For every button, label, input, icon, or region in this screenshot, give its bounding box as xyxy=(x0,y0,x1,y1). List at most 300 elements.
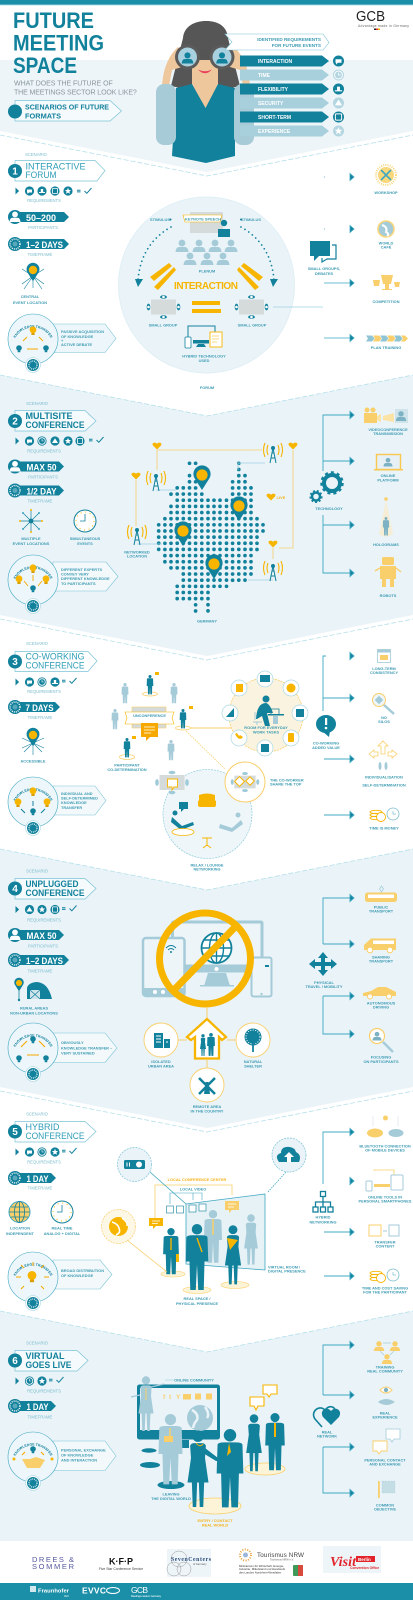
scenario heading: CONFERENCE xyxy=(26,660,84,670)
circle: remote area: REMOTE AREA xyxy=(193,1104,221,1109)
requirements row xyxy=(16,905,76,922)
scenario heading: 4 xyxy=(12,884,18,895)
icon: real time xyxy=(44,1201,81,1236)
banner: scenarios of future formats xyxy=(8,100,122,121)
label: relax lounge: RELAX / LOUNGE xyxy=(190,862,224,868)
panel: scenario 3 co-working conference xyxy=(8,641,406,872)
panel: scenario 2 multisite conference xyxy=(8,401,408,624)
participants: 50–200 xyxy=(26,213,56,224)
handshake figures xyxy=(188,1429,243,1528)
title: FUTURE xyxy=(13,8,94,33)
footer band xyxy=(0,1583,413,1600)
logo: Fraunhofer: IAO xyxy=(64,1594,70,1598)
stimulus arrows left xyxy=(135,217,172,287)
logo: Seven Centers xyxy=(167,1549,212,1577)
scenario heading: 5 xyxy=(12,1127,18,1138)
callout: knowledge transfer 4: KNOWLEDGE TRANSFER – xyxy=(61,1046,113,1050)
callout: knowledge transfer 5: OF KNOWLEDGE xyxy=(61,1273,94,1278)
stimulus arrows left: STIMULUS xyxy=(150,217,170,222)
timeframe: TIMEFRAME xyxy=(28,252,53,257)
central circle: interaction xyxy=(118,197,294,373)
icon: time and cost saving xyxy=(362,1269,408,1294)
icon: transfer content: TRANSFER xyxy=(374,1240,396,1244)
icon: rural areas: NON-URBAN LOCATIONS xyxy=(10,1010,58,1016)
participants grey xyxy=(112,683,177,760)
scenario heading: SCENARIO xyxy=(25,152,48,157)
icon: world cafe: WORLD xyxy=(379,240,394,246)
connector lines xyxy=(186,728,232,769)
title xyxy=(13,8,104,78)
participants: PARTICIPANTS xyxy=(28,474,58,480)
timeframe xyxy=(8,700,60,720)
callout: knowledge transfer 1: PASSIVE ACQUISITION xyxy=(61,329,104,334)
timeframe: 1 DAY xyxy=(26,1402,49,1413)
networked towers: LOCATION xyxy=(127,554,147,558)
logo: Drees and Sommer: SOMMER xyxy=(32,1562,75,1571)
circle: natural shelter: SHELTER xyxy=(244,1064,262,1068)
icon: multiple event locations: MULTIPLE xyxy=(21,536,41,541)
icon: personal contact: AND EXCHANGE xyxy=(369,1462,401,1466)
icon: simultaneous events xyxy=(70,510,101,546)
banner: identified requirements xyxy=(225,34,329,50)
online monitor: f xyxy=(163,1394,166,1401)
callout: knowledge transfer 6 xyxy=(8,1432,116,1491)
callout: knowledge transfer 3: KNOWLEDGE xyxy=(61,800,87,805)
prohibition sign xyxy=(160,913,250,1004)
timeframe: 1–2 DAYS xyxy=(26,240,63,251)
small groups debates xyxy=(273,241,340,307)
scenario heading: SCENARIO xyxy=(26,401,49,406)
banner: identified requirements: FOR FUTURE EVENTS xyxy=(272,43,321,48)
icon: online platform: PLATFORM xyxy=(377,478,399,482)
scenario heading xyxy=(8,868,96,899)
icon: physical mobility arrows: TRAVEL / MOBILITY xyxy=(305,984,343,989)
networked towers xyxy=(124,443,282,581)
icon: real network hearts: REAL xyxy=(322,1430,333,1434)
icon: simultaneous events: SIMULTANEOUS xyxy=(70,536,101,541)
requirements list: EXPERIENCE xyxy=(258,129,291,135)
scenario heading: SCENARIO xyxy=(26,641,49,646)
ribbons xyxy=(150,263,263,313)
logo: KFP: K·F·P xyxy=(109,1556,133,1566)
icon: no silos: NO xyxy=(381,715,387,720)
icon: focusing on participants xyxy=(363,1028,399,1064)
label: online community: ONLINE COMMUNITY xyxy=(174,1378,214,1382)
timeframe xyxy=(8,237,69,257)
logo: GCB: GCB xyxy=(356,8,385,25)
icon: added value xyxy=(312,715,340,750)
scenario heading xyxy=(8,152,105,181)
icon: self-determination xyxy=(362,741,406,788)
requirements row: REQUIREMENTS xyxy=(27,1388,61,1394)
icon: long-term consistency: LONG-TERM xyxy=(372,666,396,671)
icon: sharing transport xyxy=(364,938,396,964)
logo: Tourismus NRW: Tourismus NRW xyxy=(257,1552,304,1559)
online monitor: t xyxy=(169,1394,172,1401)
logo: Tourismus NRW: Ministerium für Wirtschaft, Energie, xyxy=(239,1564,284,1568)
timeframe: TIMEFRAME xyxy=(28,968,53,974)
logo: KFP: Five Star Conference Service xyxy=(99,1567,143,1571)
callout: knowledge transfer 6: PERSONAL EXCHANGE xyxy=(61,1448,106,1452)
logo: Tourismus NRW: Tourismus NRW e.V. xyxy=(270,1558,294,1562)
icon: multiple event locations: EVENT LOCATIONS xyxy=(13,541,50,546)
scenario heading: 2 xyxy=(12,416,18,428)
label: germany: GERMANY xyxy=(197,618,217,624)
callout: knowledge transfer 5: KNOWLEDGE TRANSFER xyxy=(13,1263,52,1276)
circle: everyday work tasks: WORK TASKS xyxy=(253,730,280,734)
requirements row xyxy=(16,677,76,694)
timeframe: TIMEFRAME xyxy=(28,1186,53,1190)
map: Germany dot matrix xyxy=(159,463,263,611)
circle: isolated urban area xyxy=(144,1023,178,1068)
label: relax lounge xyxy=(190,862,224,872)
panel: scenario 4 unplugged conference xyxy=(8,868,399,1114)
icon: time and cost saving: TIME AND COST SAVING xyxy=(362,1286,408,1290)
scenario heading: GOES LIVE xyxy=(26,1360,72,1370)
icon: online tools xyxy=(359,1170,412,1204)
participants: MAX 50 xyxy=(26,462,56,473)
hybrid technology xyxy=(182,326,226,363)
timeframe xyxy=(8,1171,56,1190)
icon: real community: REAL COMMUNITY xyxy=(367,1368,403,1374)
small groups: SMALL GROUP xyxy=(238,322,267,328)
icon: common objective: COMMON xyxy=(376,1502,394,1508)
leaving the digital world: LEAVING xyxy=(162,1492,180,1496)
icon: rural areas: RURAL AREAS xyxy=(20,1006,48,1010)
callout: knowledge transfer 6: KNOWLEDGE TRANSFER xyxy=(13,1443,52,1456)
logo: GCB footer: Meetings made in Germany xyxy=(131,1594,162,1598)
circle: isolated urban area: ISOLATED xyxy=(151,1059,171,1064)
icon: central event location: EVENT LOCATION xyxy=(13,300,47,305)
subtitle: THE MEETINGS SECTOR LOOK LIKE? xyxy=(14,90,137,96)
icon: physical mobility arrows: PHYSICAL xyxy=(314,980,334,985)
requirements list: SECURITY xyxy=(258,101,284,107)
live hearts: LIVE xyxy=(277,495,286,500)
callout: knowledge transfer 2: KNOWLEDGE TRANSFER xyxy=(13,566,52,580)
branch arrows xyxy=(323,1342,354,1496)
circle: natural shelter: NATURAL xyxy=(244,1059,263,1064)
panel: scenario 6 virtual goes live xyxy=(8,1340,406,1528)
logo: Tourismus NRW xyxy=(239,1550,304,1576)
icon: real community xyxy=(367,1341,403,1374)
stimulus arrows right xyxy=(240,217,278,287)
label: virtual room: DIGITAL PRESENCE xyxy=(268,1268,306,1274)
location pins xyxy=(174,465,248,579)
icon: real experience xyxy=(372,1387,398,1420)
logo: GCB: Advantage made in Germany xyxy=(358,24,409,28)
requirements list: INTERACTION xyxy=(258,59,293,65)
callout: knowledge transfer 3: INDIVIDUAL AND xyxy=(61,791,93,796)
logo: GCB footer: GCB xyxy=(131,1585,148,1595)
callout: knowledge transfer 4 xyxy=(8,1022,118,1082)
real space figures xyxy=(161,1224,249,1294)
scenario heading: CONFERENCE xyxy=(26,888,84,898)
icon: videoconference: VIDEOCONFERENCE xyxy=(368,427,408,432)
icon: physical mobility arrows xyxy=(305,952,343,989)
callout: knowledge transfer 3: TRANSFER xyxy=(61,805,82,810)
icon: real time: REAL TIME xyxy=(52,1226,73,1230)
hybrid technology: USED xyxy=(199,358,210,363)
icon: autonomous driving: AUTONOMOUS xyxy=(367,1000,396,1006)
label: real space: PHYSICAL PRESENCE xyxy=(176,1301,218,1306)
panel: scenario 5 hybrid conference xyxy=(6,1112,412,1311)
icon: real experience: EXPERIENCE xyxy=(372,1414,398,1420)
callout: knowledge transfer 2 xyxy=(8,554,118,614)
icon: autonomous driving xyxy=(363,987,396,1010)
logo: KFP xyxy=(99,1556,143,1571)
requirements row xyxy=(16,1147,76,1164)
callout: knowledge transfer 2: DIFFERENT KNOWLEDGE xyxy=(61,576,110,581)
icon: self-determination: SELF-DETERMINATION xyxy=(362,782,406,788)
icon: focusing on participants: FOCUSING xyxy=(371,1054,391,1060)
icon: public transport: PUBLIC xyxy=(374,904,388,910)
logo: Tourismus NRW: Industrie, Mittelstand und Handwerk xyxy=(239,1567,286,1571)
scenario heading: SCENARIO xyxy=(26,868,49,874)
callout: knowledge transfer 3: KNOWLEDGE TRANSFER xyxy=(13,788,52,802)
icon: hybrid networking: HYBRID xyxy=(316,1214,331,1220)
requirements list xyxy=(240,55,344,137)
callout: knowledge transfer 1 xyxy=(8,314,116,373)
woman leaving screen xyxy=(131,1376,164,1431)
small groups debates: SMALL GROUPS, xyxy=(308,266,340,271)
icon: holograms: HOLOGRAMS xyxy=(373,542,399,547)
requirements row: REQUIREMENTS xyxy=(27,198,61,203)
scenario heading: MULTISITE xyxy=(26,411,72,421)
participants: MAX 50 xyxy=(26,931,56,942)
branch arrows xyxy=(323,894,354,1038)
label: table co-working xyxy=(270,778,304,786)
callout: knowledge transfer 1: OF KNOWLEDGE xyxy=(61,334,94,339)
projection screen xyxy=(186,1194,265,1270)
circle: remote area xyxy=(190,1068,224,1114)
icon: real experience: REAL xyxy=(380,1410,391,1416)
participants co-determination: CO-DETERMINATION xyxy=(107,767,147,772)
icon: added value: ADDED VALUE xyxy=(312,745,340,750)
participants co-determination: PARTICIPANT xyxy=(114,762,140,768)
logo: Drees and Sommer xyxy=(32,1555,75,1571)
callout: knowledge transfer 4: OBVIOUSLY xyxy=(61,1040,84,1045)
timeframe: 1/2 DAY xyxy=(26,486,57,497)
timeframe: 7 DAYS xyxy=(26,703,54,714)
icon: sharing transport: SHARING xyxy=(372,954,390,960)
banner: identified requirements: IDENTIFIED REQUIREMENTS xyxy=(257,37,321,42)
logo: Tourismus NRW: des Landes Nordrhein-Westfalen xyxy=(239,1570,282,1574)
icon: accessible xyxy=(20,728,46,764)
callout: knowledge transfer 4: KNOWLEDGE TRANSFER xyxy=(13,1034,52,1048)
frame: local conference: LOCAL VIDEO xyxy=(180,1186,206,1192)
requirements row xyxy=(16,436,104,454)
icon: location independent: LOCATION xyxy=(10,1226,30,1230)
scenario heading: CONFERENCE xyxy=(26,1131,84,1141)
icon: yellow globe xyxy=(102,1210,167,1272)
circle: everyday work tasks: ROOM FOR EVERYDAY xyxy=(244,725,288,730)
label: relax lounge: NETWORKING xyxy=(193,866,221,872)
requirements row: REQUIREMENTS xyxy=(27,1160,61,1164)
icon: format chevrons xyxy=(366,336,408,350)
speech bubbles xyxy=(149,1201,239,1229)
subtitle xyxy=(14,80,137,96)
logo: Fraunhofer: Fraunhofer xyxy=(38,1588,70,1594)
panel: partner logos xyxy=(32,1546,381,1577)
icon: time is money: TIME IS MONEY xyxy=(369,826,399,830)
lounge circle xyxy=(155,762,265,858)
online monitor: Y xyxy=(176,1394,181,1401)
online monitor xyxy=(137,1384,220,1448)
devices xyxy=(143,920,272,996)
icon: competition xyxy=(372,275,400,304)
icon: transfer content xyxy=(369,1225,399,1248)
icon: real time: ANALOG + DIGITAL xyxy=(44,1231,81,1236)
icon: common objective: OBJECTIVE xyxy=(374,1506,396,1512)
connectors xyxy=(178,1007,236,1068)
participants: PARTICIPANTS xyxy=(28,225,58,230)
icon: multiple event locations xyxy=(13,509,50,546)
frame: local conference xyxy=(155,1177,232,1218)
timeframe xyxy=(8,484,64,504)
logo: GCB footer xyxy=(131,1585,162,1598)
participants xyxy=(8,210,69,230)
scenario heading: VIRTUAL xyxy=(26,1351,65,1361)
scenario heading xyxy=(8,1340,88,1371)
scenario heading: SCENARIO xyxy=(26,1112,49,1116)
requirements list: SHORT-TERM xyxy=(258,115,291,121)
scenario heading: 3 xyxy=(12,657,18,668)
participants xyxy=(8,460,64,480)
plenum: PLENUM xyxy=(199,268,215,274)
icon: format chevrons: PLAN TRAINING xyxy=(371,345,401,350)
circle: remote area: IN THE COUNTRY xyxy=(191,1108,224,1114)
subtitle: WHAT DOES THE FUTURE OF xyxy=(14,80,113,88)
scenario heading xyxy=(8,1112,96,1142)
label: table co-working: THE CO-WORKER xyxy=(270,778,304,782)
network lines xyxy=(136,450,293,580)
logo: Visit Berlin xyxy=(323,1546,381,1573)
banner: scenarios of future formats: SCENARIOS OF FUTURE xyxy=(25,102,109,112)
scenario heading: CONFERENCE xyxy=(26,420,84,430)
branch arrows xyxy=(323,1128,354,1280)
icon: autonomous driving: DRIVING xyxy=(373,1004,389,1010)
icon: workshop: WORKSHOP xyxy=(374,190,398,195)
icon: hybrid networking: NETWORKING xyxy=(309,1220,337,1224)
icon: public transport xyxy=(365,886,397,914)
scenario heading: INTERACTIVE xyxy=(26,162,86,172)
icon: videoconference xyxy=(364,408,408,436)
icon: online platform: ONLINE xyxy=(381,473,396,478)
small groups xyxy=(147,295,268,328)
logo: Visit Berlin: Berlin xyxy=(358,1557,371,1562)
scenario heading: HYBRID xyxy=(26,1122,60,1132)
branch arrows xyxy=(323,412,354,576)
icon: no silos xyxy=(372,694,394,724)
label: virtual room: VIRTUAL ROOM / xyxy=(268,1264,301,1270)
scenario heading: UNPLUGGED xyxy=(26,879,79,889)
callout: knowledge transfer 5: BROAD DISTRIBUTION xyxy=(61,1268,104,1273)
callout: knowledge transfer 1: + xyxy=(61,338,64,343)
label: real space: REAL SPACE / xyxy=(184,1296,211,1301)
callout: knowledge transfer 5 xyxy=(8,1252,112,1311)
timeframe xyxy=(8,953,69,974)
requirements list: FLEXIBILITY xyxy=(258,87,289,93)
banner: scenarios of future formats: FORMATS xyxy=(25,112,61,120)
icon: hybrid networking xyxy=(309,1192,337,1224)
logo: EVVC xyxy=(82,1586,120,1596)
participants xyxy=(8,928,64,948)
logo: EVVC: EVVC xyxy=(82,1586,106,1596)
branch arrows xyxy=(324,174,354,342)
icon: world cafe xyxy=(378,221,394,250)
icon: robots: ROBOTS xyxy=(380,593,397,598)
timeframe: 1–2 DAYS xyxy=(26,956,63,967)
icon: personal contact xyxy=(364,1429,406,1466)
requirements list: TIME xyxy=(258,73,271,79)
label: forum: FORUM xyxy=(200,385,214,390)
label: virtual room xyxy=(268,1264,306,1274)
circle: isolated urban area: URBAN AREA xyxy=(148,1064,174,1068)
scenario heading xyxy=(8,641,97,672)
callout: knowledge transfer 6: AND INTERACTION xyxy=(61,1458,97,1462)
keynote speech xyxy=(183,212,230,237)
logo: Visit Berlin: Visit xyxy=(330,1555,357,1570)
icon: projector xyxy=(118,1148,186,1204)
icon: real network hearts xyxy=(314,1407,340,1438)
scenario heading: 6 xyxy=(12,1356,18,1367)
icon: time is money xyxy=(369,808,399,830)
requirements row xyxy=(16,186,92,203)
icon: online tools: PERSONAL SMARTPHONES xyxy=(359,1198,412,1204)
callout: knowledge transfer 2: DIFFERENT EXPERTS xyxy=(61,567,102,572)
callout: knowledge transfer 2: TO PARTICIPANTS xyxy=(61,581,96,586)
unconference board xyxy=(125,707,174,741)
icon: technology gears: TECHNOLOGY xyxy=(315,506,343,511)
icon: competition: COMPETITION xyxy=(372,299,400,304)
callout: knowledge transfer 3: SELF-DETERMINED xyxy=(61,796,98,800)
icon: central event location xyxy=(13,263,47,305)
title: SPACE xyxy=(13,53,77,78)
panel: header xyxy=(8,8,409,163)
icon: simultaneous events: EVENTS xyxy=(77,541,93,546)
logo: Seven Centers: of Germany xyxy=(193,1562,207,1566)
interaction label: INTERACTION xyxy=(174,281,238,292)
icon: holograms xyxy=(373,497,399,547)
timeframe: TIMEFRAME xyxy=(28,1414,53,1420)
callout: knowledge transfer 6: OF KNOWLEDGE xyxy=(61,1452,94,1458)
label: table co-working: SHARE THE TOP xyxy=(270,782,302,786)
icon: long-term consistency xyxy=(370,650,398,675)
icon: world cafe: CAFÉ xyxy=(381,244,392,250)
scenario heading xyxy=(8,401,96,431)
branch arrows xyxy=(323,652,354,818)
icon: online tools: ONLINE TOOLS IN xyxy=(368,1194,402,1200)
icon: rural areas xyxy=(10,978,58,1016)
participants: PARTICIPANTS xyxy=(28,944,58,948)
scenario heading: CO-WORKING xyxy=(26,652,84,662)
icon: sharing transport: TRANSPORT xyxy=(369,958,394,964)
icon: no silos: SILOS xyxy=(378,719,390,724)
icon: long-term consistency: CONSISTENCY xyxy=(370,670,398,675)
logo: Fraunhofer xyxy=(30,1586,70,1598)
label: real space xyxy=(176,1296,218,1306)
icon: real network hearts: NETWORK xyxy=(317,1434,337,1438)
keynote speech: KEYNOTE SPEECH xyxy=(185,216,221,222)
unconference board: UNCONFERENCE xyxy=(133,713,166,718)
icon: real community: TRAINING xyxy=(376,1364,394,1370)
icon: transfer content: CONTENT xyxy=(376,1244,395,1248)
icon: robots xyxy=(375,557,401,598)
callout: knowledge transfer 3 xyxy=(8,776,106,836)
icon: public transport: TRANSPORT xyxy=(369,908,394,914)
circle: everyday work tasks xyxy=(222,671,308,756)
house with couple xyxy=(187,1019,226,1058)
